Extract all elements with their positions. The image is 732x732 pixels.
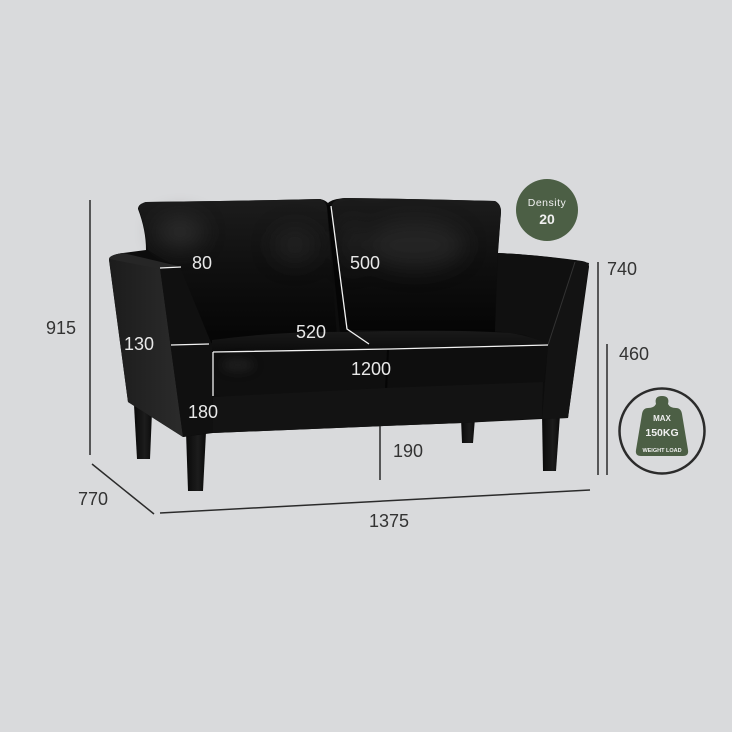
weight load badge: WEIGHT LOAD [642,448,682,454]
seat cushions top [212,331,548,352]
labels outside: 915 [46,318,76,338]
cushion seam [327,205,348,332]
labels on sofa: 520 [296,322,326,342]
density badge: 20 [539,211,555,227]
left arm outer side [109,259,183,437]
front legs [186,415,560,491]
density badge: Density [528,197,567,209]
labels on sofa: 130 [124,334,154,354]
sofa [109,198,589,491]
left arm top [109,253,178,269]
seat cushion fronts [212,349,388,397]
labels outside: 740 [607,259,637,279]
weight load badge: MAX [653,414,672,423]
seat cushion highlights [222,359,254,371]
labels outside: 190 [393,441,423,461]
dimension lines on sofa [160,206,548,396]
labels outside: 460 [619,344,649,364]
right arm front panel [542,260,589,419]
labels on sofa: 80 [192,253,212,273]
cushion highlights [156,216,465,271]
back cushion: left [139,199,337,343]
labels on sofa: 500 [350,253,380,273]
labels on sofa [124,253,391,422]
labels on sofa: 1200 [351,359,391,379]
labels on sofa: 180 [188,402,218,422]
back cushion: right [332,198,501,332]
icon: weight [636,396,688,456]
weight load badge: 150KG [645,427,679,439]
dimension lines outside [90,200,607,514]
labels outside [46,259,649,531]
left arm front panel [160,267,213,437]
density badge [516,179,578,241]
back legs [134,405,475,459]
right arm inner [495,253,578,345]
seam between seat cushions [386,350,388,390]
labels outside: 1375 [369,511,409,531]
labels outside: 770 [78,489,108,509]
base rail [213,382,543,433]
weight load badge [620,388,704,474]
sofa silhouette [109,198,589,437]
right arm edge [548,262,575,345]
